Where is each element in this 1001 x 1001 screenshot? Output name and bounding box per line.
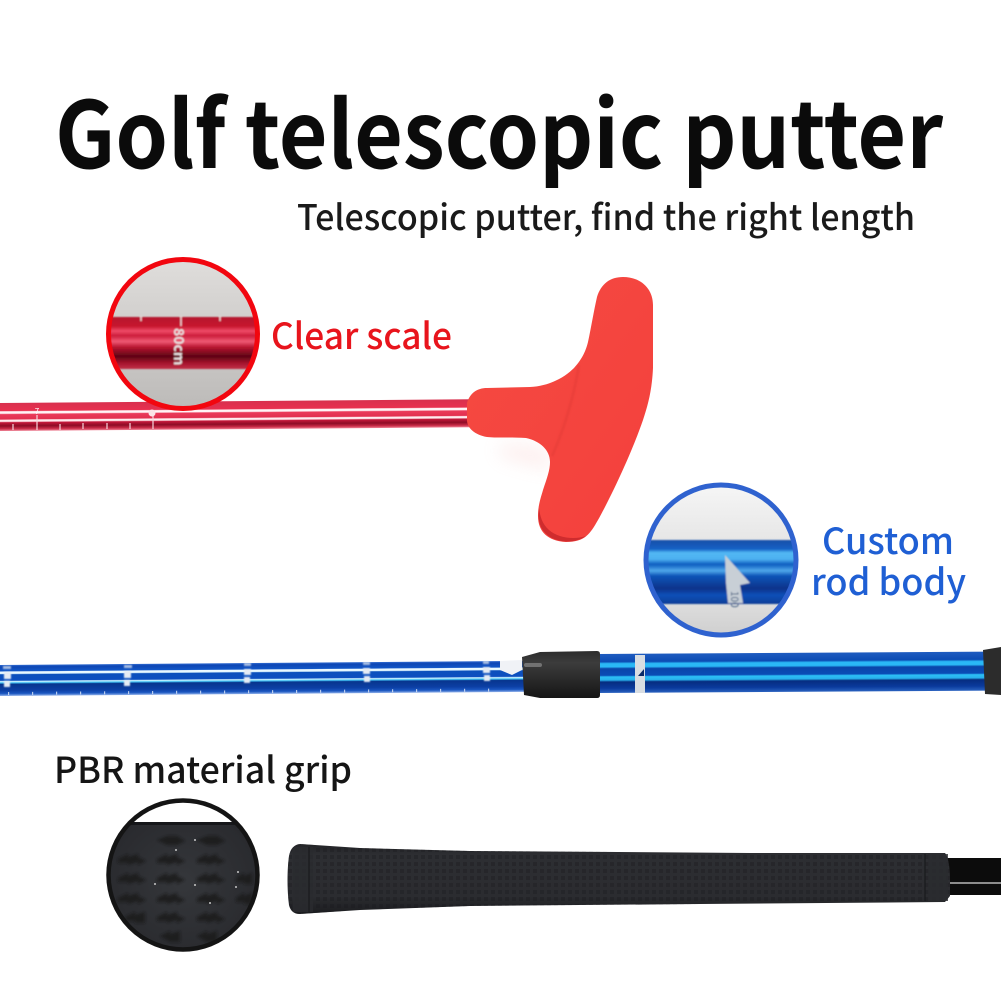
thin section xyxy=(0,661,530,696)
red putter shaft xyxy=(0,399,471,431)
end cap xyxy=(983,647,1001,695)
rubber grip xyxy=(288,844,950,914)
blue shaft xyxy=(0,647,1001,698)
arrow mark on blue shaft xyxy=(500,660,522,675)
black shaft end xyxy=(946,858,1001,895)
label: custom rod body xyxy=(811,513,966,606)
putter head xyxy=(467,277,653,542)
blue magnifier circle xyxy=(635,484,807,636)
arrow marking: 100 xyxy=(728,591,743,608)
ferrule xyxy=(522,651,600,698)
scale marks on blue shaft xyxy=(3,661,490,687)
red shaft labels: 7 xyxy=(35,406,40,417)
grip texture xyxy=(118,836,252,942)
white band with mark xyxy=(635,655,645,693)
grip and black shaft xyxy=(288,844,1001,914)
grip magnifier circle xyxy=(105,800,261,950)
subtitle: Telescopic putter, find the right length xyxy=(297,190,915,241)
label: clear scale: Clear scale xyxy=(271,308,452,360)
label: custom rod body: Custom xyxy=(822,513,954,565)
scale label 80cm: 80cm xyxy=(169,328,189,365)
label: PBR material grip: PBR material grip xyxy=(54,742,352,794)
label: custom rod body: rod body xyxy=(811,554,966,606)
thick section xyxy=(598,652,990,693)
tick marks along blue shaft xyxy=(8,690,500,694)
arrow marking xyxy=(725,555,750,608)
title: Golf telescopic putter xyxy=(55,62,944,195)
scale ticks on red shaft xyxy=(13,414,153,430)
red magnifier circle xyxy=(106,257,260,411)
